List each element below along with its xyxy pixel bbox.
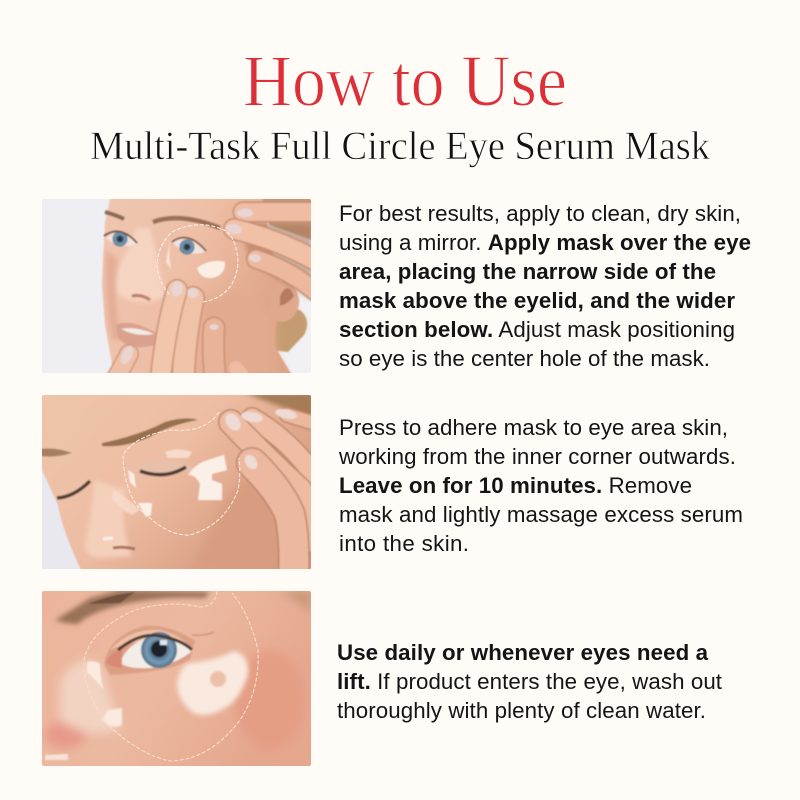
text block: step 2 instructions: Leave on for 10 minutes. Remove: [339, 473, 692, 498]
text block: step 3 instructions: Use daily or whenever eyes need a: [337, 640, 709, 665]
closed eyelids and lashes: [166, 462, 192, 471]
mask outline: [157, 225, 238, 302]
eye white: [120, 636, 193, 668]
nose: [85, 480, 132, 558]
serum patch: [197, 261, 225, 278]
shadow behind upper hand: [240, 222, 312, 300]
text block: step 2 instructions: working from the inner corner outwards.: [338, 444, 736, 469]
text block: step 1 instructions: area, placing the narrow side of the: [339, 259, 716, 284]
panel: step 1 photo, applying mask over the eye: [42, 199, 311, 373]
text block: step 2 instructions: Press to adhere mask to eye area skin,: [339, 415, 728, 440]
text block: step 1 instructions: For best results, apply to clean, dry skin,: [339, 201, 741, 226]
subtitle: Multi-Task Full Circle Eye Serum Mask: [90, 123, 711, 168]
mask outline: [84, 591, 258, 761]
serum patches: [177, 651, 248, 715]
text block: step 2 instructions: mask and lightly massage excess serum: [339, 502, 743, 527]
mask outline: [123, 412, 240, 535]
eyebrow: [55, 590, 210, 624]
panel: step 3 photo, mask on eye close-up: [42, 590, 312, 766]
text block: step 2 instructions: [338, 415, 743, 556]
text block: step 3 instructions: thoroughly with plenty of clean water.: [337, 698, 706, 723]
panel: step 2 photo, pressing mask to skin: [42, 395, 311, 569]
eye socket and lid: [104, 626, 195, 675]
left eye: [106, 233, 136, 246]
serum patches: [188, 455, 227, 500]
lashes: [118, 635, 192, 650]
hands: [112, 212, 320, 385]
text block: step 2 instructions: into the skin.: [339, 531, 469, 556]
iris: [141, 632, 177, 668]
lips: [116, 323, 156, 347]
eyebrows: [105, 212, 124, 219]
text block: step 1 instructions: so eye is the center hole of the mask.: [339, 346, 710, 371]
hand: [231, 415, 320, 585]
text block: step 1 instructions: using a mirror. Apply mask over the eye: [339, 230, 751, 255]
text block: step 1 instructions: section below. Adjust mask positioning: [339, 317, 735, 342]
right eye: [173, 239, 205, 254]
text block: step 1 instructions: [339, 201, 751, 371]
text block: step 3 instructions: lift. If product enters the eye, wash out: [337, 669, 723, 694]
text block: step 3 instructions: [337, 640, 723, 723]
nose shadow and nostril: [132, 296, 150, 300]
eyebrows: [102, 418, 198, 446]
text block: step 1 instructions: mask above the eyelid, and the wider: [339, 288, 735, 313]
title: How to Use: [243, 40, 567, 122]
